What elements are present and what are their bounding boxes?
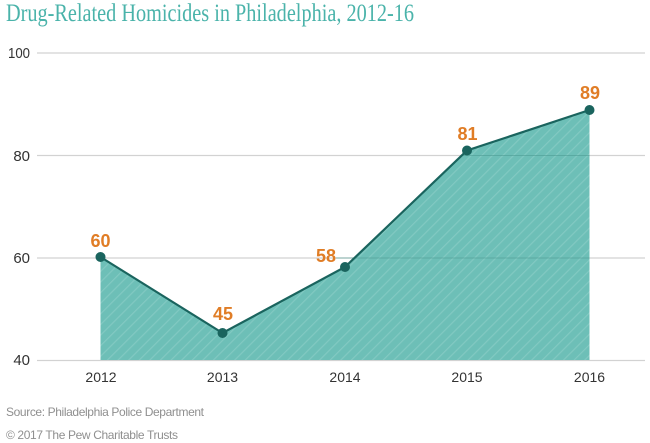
y axis labels: 40 xyxy=(13,352,30,369)
x axis labels: 2014 xyxy=(329,369,361,385)
y axis labels xyxy=(8,45,30,369)
x axis labels: 2012 xyxy=(85,369,117,385)
data value labels xyxy=(90,83,600,324)
data value labels: 60 xyxy=(90,231,111,251)
data value labels: 58 xyxy=(316,246,336,266)
gridlines xyxy=(37,53,645,360)
data line xyxy=(100,110,590,333)
source: Source: Philadelphia Police Department xyxy=(6,405,205,419)
copyright: © 2017 The Pew Charitable Trusts xyxy=(6,428,178,442)
x axis labels: 2013 xyxy=(207,369,238,385)
data value labels: 45 xyxy=(213,304,233,324)
title: Drug-Related Homicides in Philadelphia, 2012-16 xyxy=(6,0,414,27)
data value labels: 81 xyxy=(457,124,478,144)
data points xyxy=(96,105,594,338)
gridlines over area xyxy=(336,156,590,258)
y axis labels: 80 xyxy=(13,148,30,165)
x axis labels xyxy=(85,369,605,385)
shaded area xyxy=(100,110,590,360)
x axis labels: 2015 xyxy=(451,369,483,385)
data value labels: 89 xyxy=(580,83,600,103)
x axis labels: 2016 xyxy=(574,369,605,385)
y axis labels: 60 xyxy=(13,250,30,267)
y axis labels: 100 xyxy=(8,45,30,62)
